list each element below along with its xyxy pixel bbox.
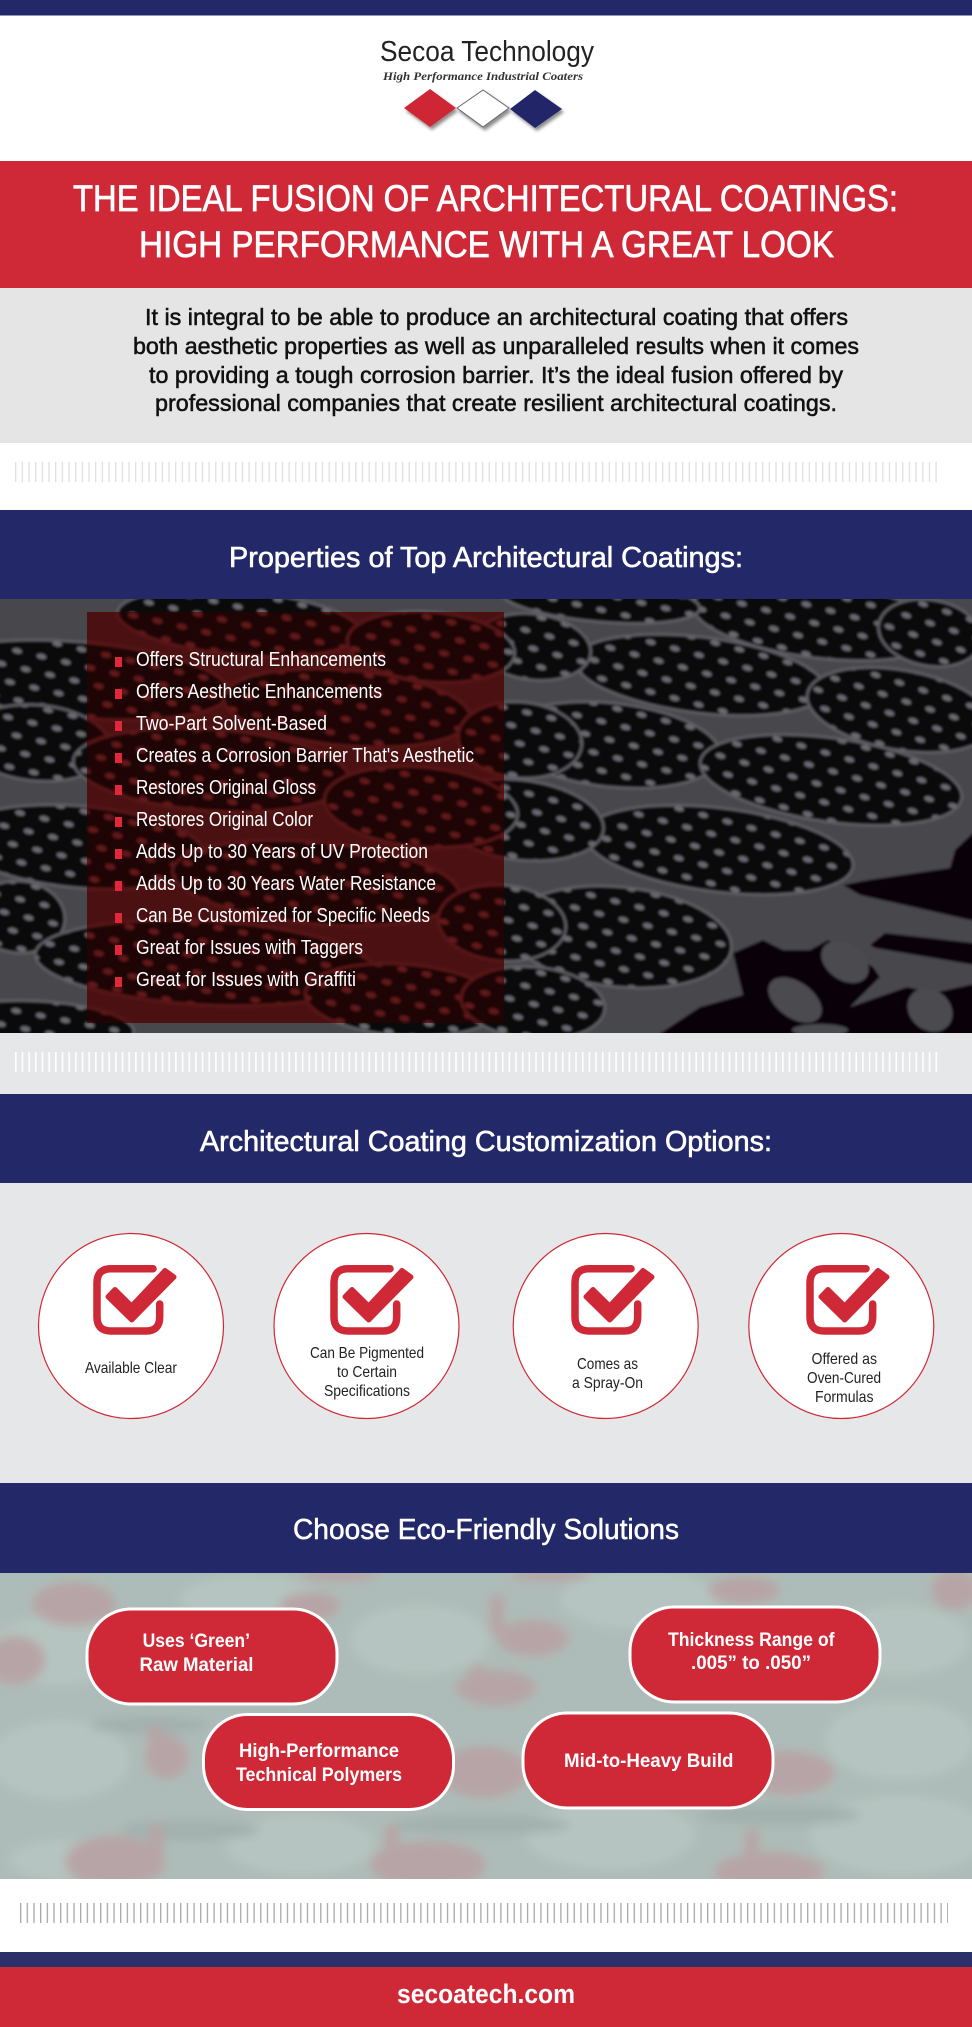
pill: green raw material <box>87 1609 337 1704</box>
label: Comes as <box>577 1356 638 1373</box>
heading: properties: Properties of Top Architectural Coatings: <box>229 542 743 574</box>
heading: customization: Architectural Coating Customization Options: <box>200 1126 772 1158</box>
pill: thickness range <box>630 1607 880 1702</box>
panel: properties photo <box>0 599 972 1033</box>
icon: checkbox <box>334 1269 411 1331</box>
pill: mid-to-heavy build <box>523 1713 773 1808</box>
property list: Offers Structural Enhancements <box>136 648 386 671</box>
section heading bar: properties <box>0 510 972 599</box>
intro text: professional companies that create resilient architectural coatings. <box>155 390 837 416</box>
logo tagline: High Performance Industrial Coaters <box>382 69 583 83</box>
top bar <box>0 0 972 16</box>
label: Oven-Cured <box>807 1370 881 1387</box>
property list: Adds Up to 30 Years of UV Protection <box>136 840 428 863</box>
title line 2: HIGH PERFORMANCE WITH A GREAT LOOK <box>139 224 834 265</box>
section heading bar: eco-friendly <box>0 1483 972 1573</box>
pill: thickness range: Thickness Range of <box>668 1629 835 1651</box>
pill: technical polymers: Technical Polymers <box>236 1764 402 1786</box>
option: pigmented <box>274 1234 459 1418</box>
label: a Spray-On <box>572 1375 643 1392</box>
option: oven-cured <box>749 1234 934 1418</box>
photo background: pale caps with red tabs <box>0 1573 972 1879</box>
label: Specifications <box>324 1383 410 1400</box>
footer navy bar <box>0 1952 972 1967</box>
label: Offered as <box>812 1351 877 1368</box>
pill: technical polymers <box>204 1714 454 1810</box>
property list: Great for Issues with Taggers <box>136 936 363 959</box>
section heading bar: customization <box>0 1094 972 1183</box>
stripe divider 1 <box>15 462 942 482</box>
property list: Adds Up to 30 Years Water Resistance <box>136 872 436 895</box>
property list: Great for Issues with Graffiti <box>136 968 356 991</box>
property list: Creates a Corrosion Barrier That's Aesthetic <box>136 744 474 767</box>
icon: checkbox <box>97 1269 174 1331</box>
option: available clear <box>38 1234 224 1418</box>
photo background: perforated coated parts <box>0 599 972 1033</box>
pill: thickness range: .005” to .050” <box>691 1652 811 1674</box>
title banner <box>0 161 972 288</box>
property list: Restores Original Gloss <box>136 776 316 799</box>
intro panel <box>0 288 972 443</box>
grey divider band <box>0 1033 972 1094</box>
property list: Can Be Customized for Specific Needs <box>136 904 430 927</box>
dark machine parts, lower right <box>659 832 972 1033</box>
option: spray-on <box>513 1234 698 1418</box>
stripe divider 3 <box>20 1903 948 1923</box>
list bullets <box>115 657 122 987</box>
intro text: both aesthetic properties as well as unparalleled results when it comes <box>133 333 859 359</box>
property list: Two-Part Solvent-Based <box>136 712 327 735</box>
website url: secoatech.com <box>397 1979 575 2009</box>
logo diamonds <box>404 89 562 128</box>
intro text: It is integral to be able to produce an architectural coating that offers <box>145 304 848 330</box>
logo wordmark: Secoa Technology <box>380 36 595 68</box>
pill: green raw material: Raw Material <box>140 1654 254 1676</box>
label: Available Clear <box>85 1360 178 1377</box>
property list: Offers Aesthetic Enhancements <box>136 680 382 703</box>
panel: customization options <box>0 1183 972 1483</box>
intro text <box>133 304 859 416</box>
footer <box>0 1967 972 2027</box>
icon: checkbox <box>575 1269 652 1331</box>
label <box>807 1351 881 1406</box>
pill: technical polymers: High-Performance <box>239 1740 399 1762</box>
pill: green raw material: Uses ‘Green’ <box>143 1630 250 1652</box>
logo <box>380 36 595 128</box>
heading: eco-friendly: Choose Eco-Friendly Solutions <box>293 1514 679 1546</box>
intro text: to providing a tough corrosion barrier. It’s the ideal fusion offered by <box>149 362 843 388</box>
label <box>310 1345 424 1400</box>
label: to Certain <box>337 1364 397 1381</box>
property list <box>115 648 474 991</box>
stripe divider 2 <box>15 1052 942 1072</box>
panel: eco-friendly photo <box>0 1573 972 1879</box>
icon: checkbox <box>810 1269 887 1331</box>
label: Formulas <box>815 1389 874 1406</box>
photo darkening overlay <box>0 599 972 1033</box>
red translucent list panel <box>87 612 504 1023</box>
label <box>572 1356 643 1392</box>
property list: Restores Original Color <box>136 808 313 831</box>
pill: mid-to-heavy build: Mid-to-Heavy Build <box>564 1750 734 1772</box>
label: Can Be Pigmented <box>310 1345 424 1362</box>
